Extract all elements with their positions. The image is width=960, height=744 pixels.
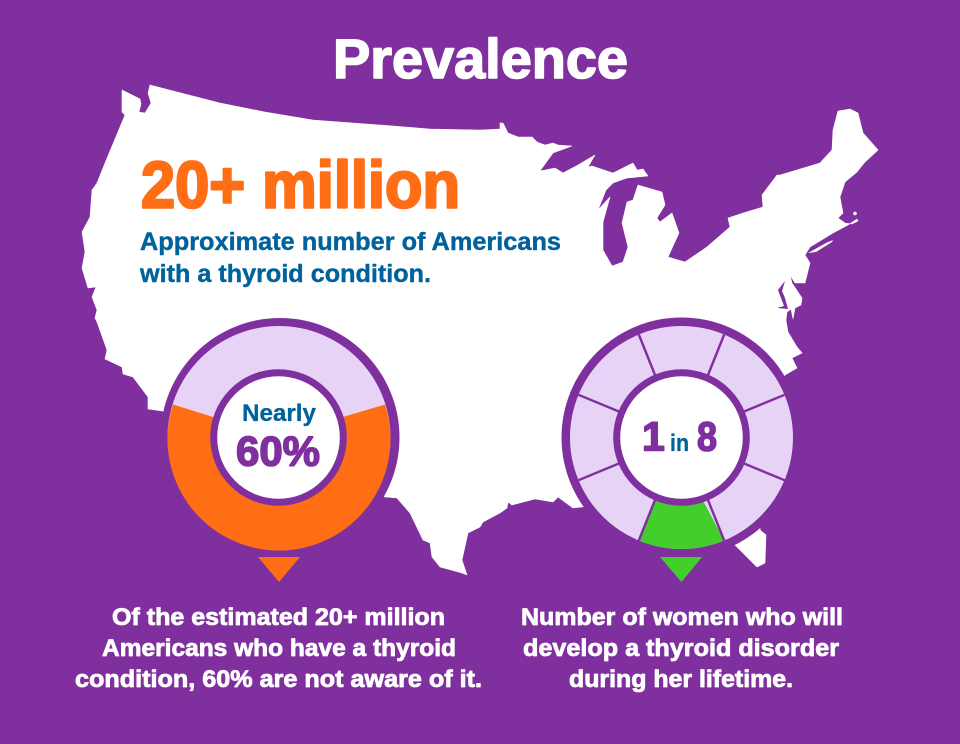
- segment dividers: [578, 334, 784, 540]
- headline: 20+ million: 20+ million: [141, 148, 460, 222]
- arrow: orange: [258, 557, 300, 582]
- number: 1 in 8: 1: [642, 414, 665, 460]
- caption: women thyroid disorder: develop a thyroid disorder: [523, 635, 839, 662]
- green 1/8 segment: [639, 495, 724, 549]
- arrow: green: [660, 557, 702, 582]
- center circle: [617, 373, 746, 502]
- pie chart: 1 in 8: [562, 318, 802, 558]
- island: Long Island: [808, 240, 833, 253]
- subheading: approximate number: [139, 228, 561, 288]
- donut chart: nearly 60%: [160, 318, 400, 557]
- island: Nantucket: [853, 212, 857, 215]
- number: 1 in 8: in: [670, 430, 689, 457]
- number: 1 in 8: [642, 414, 717, 460]
- center circle: [214, 373, 343, 502]
- subheading: approximate number: Approximate number of Americans: [140, 228, 561, 256]
- bay: Chesapeake: [777, 281, 788, 309]
- caption: 60% not aware: Americans who have a thyroid: [102, 635, 456, 662]
- number: 60%: 60%: [236, 428, 320, 474]
- caption: women thyroid disorder: Number of women who will: [521, 604, 843, 631]
- caption: women thyroid disorder: [521, 604, 843, 693]
- title: Prevalence: [333, 27, 628, 90]
- orange 60% segment: [168, 404, 390, 551]
- caption: 60% not aware: Of the estimated 20+ million: [112, 604, 445, 631]
- caption: women thyroid disorder: during her lifetime.: [569, 666, 793, 693]
- label: Nearly: Nearly: [242, 400, 317, 427]
- subheading: approximate number: with a thyroid condition.: [139, 260, 431, 288]
- number: 1 in 8: 8: [697, 414, 717, 460]
- map of the United States: [82, 85, 878, 575]
- caption: 60% not aware: condition, 60% are not aware of it.: [75, 666, 482, 693]
- caption: 60% not aware: [75, 604, 482, 693]
